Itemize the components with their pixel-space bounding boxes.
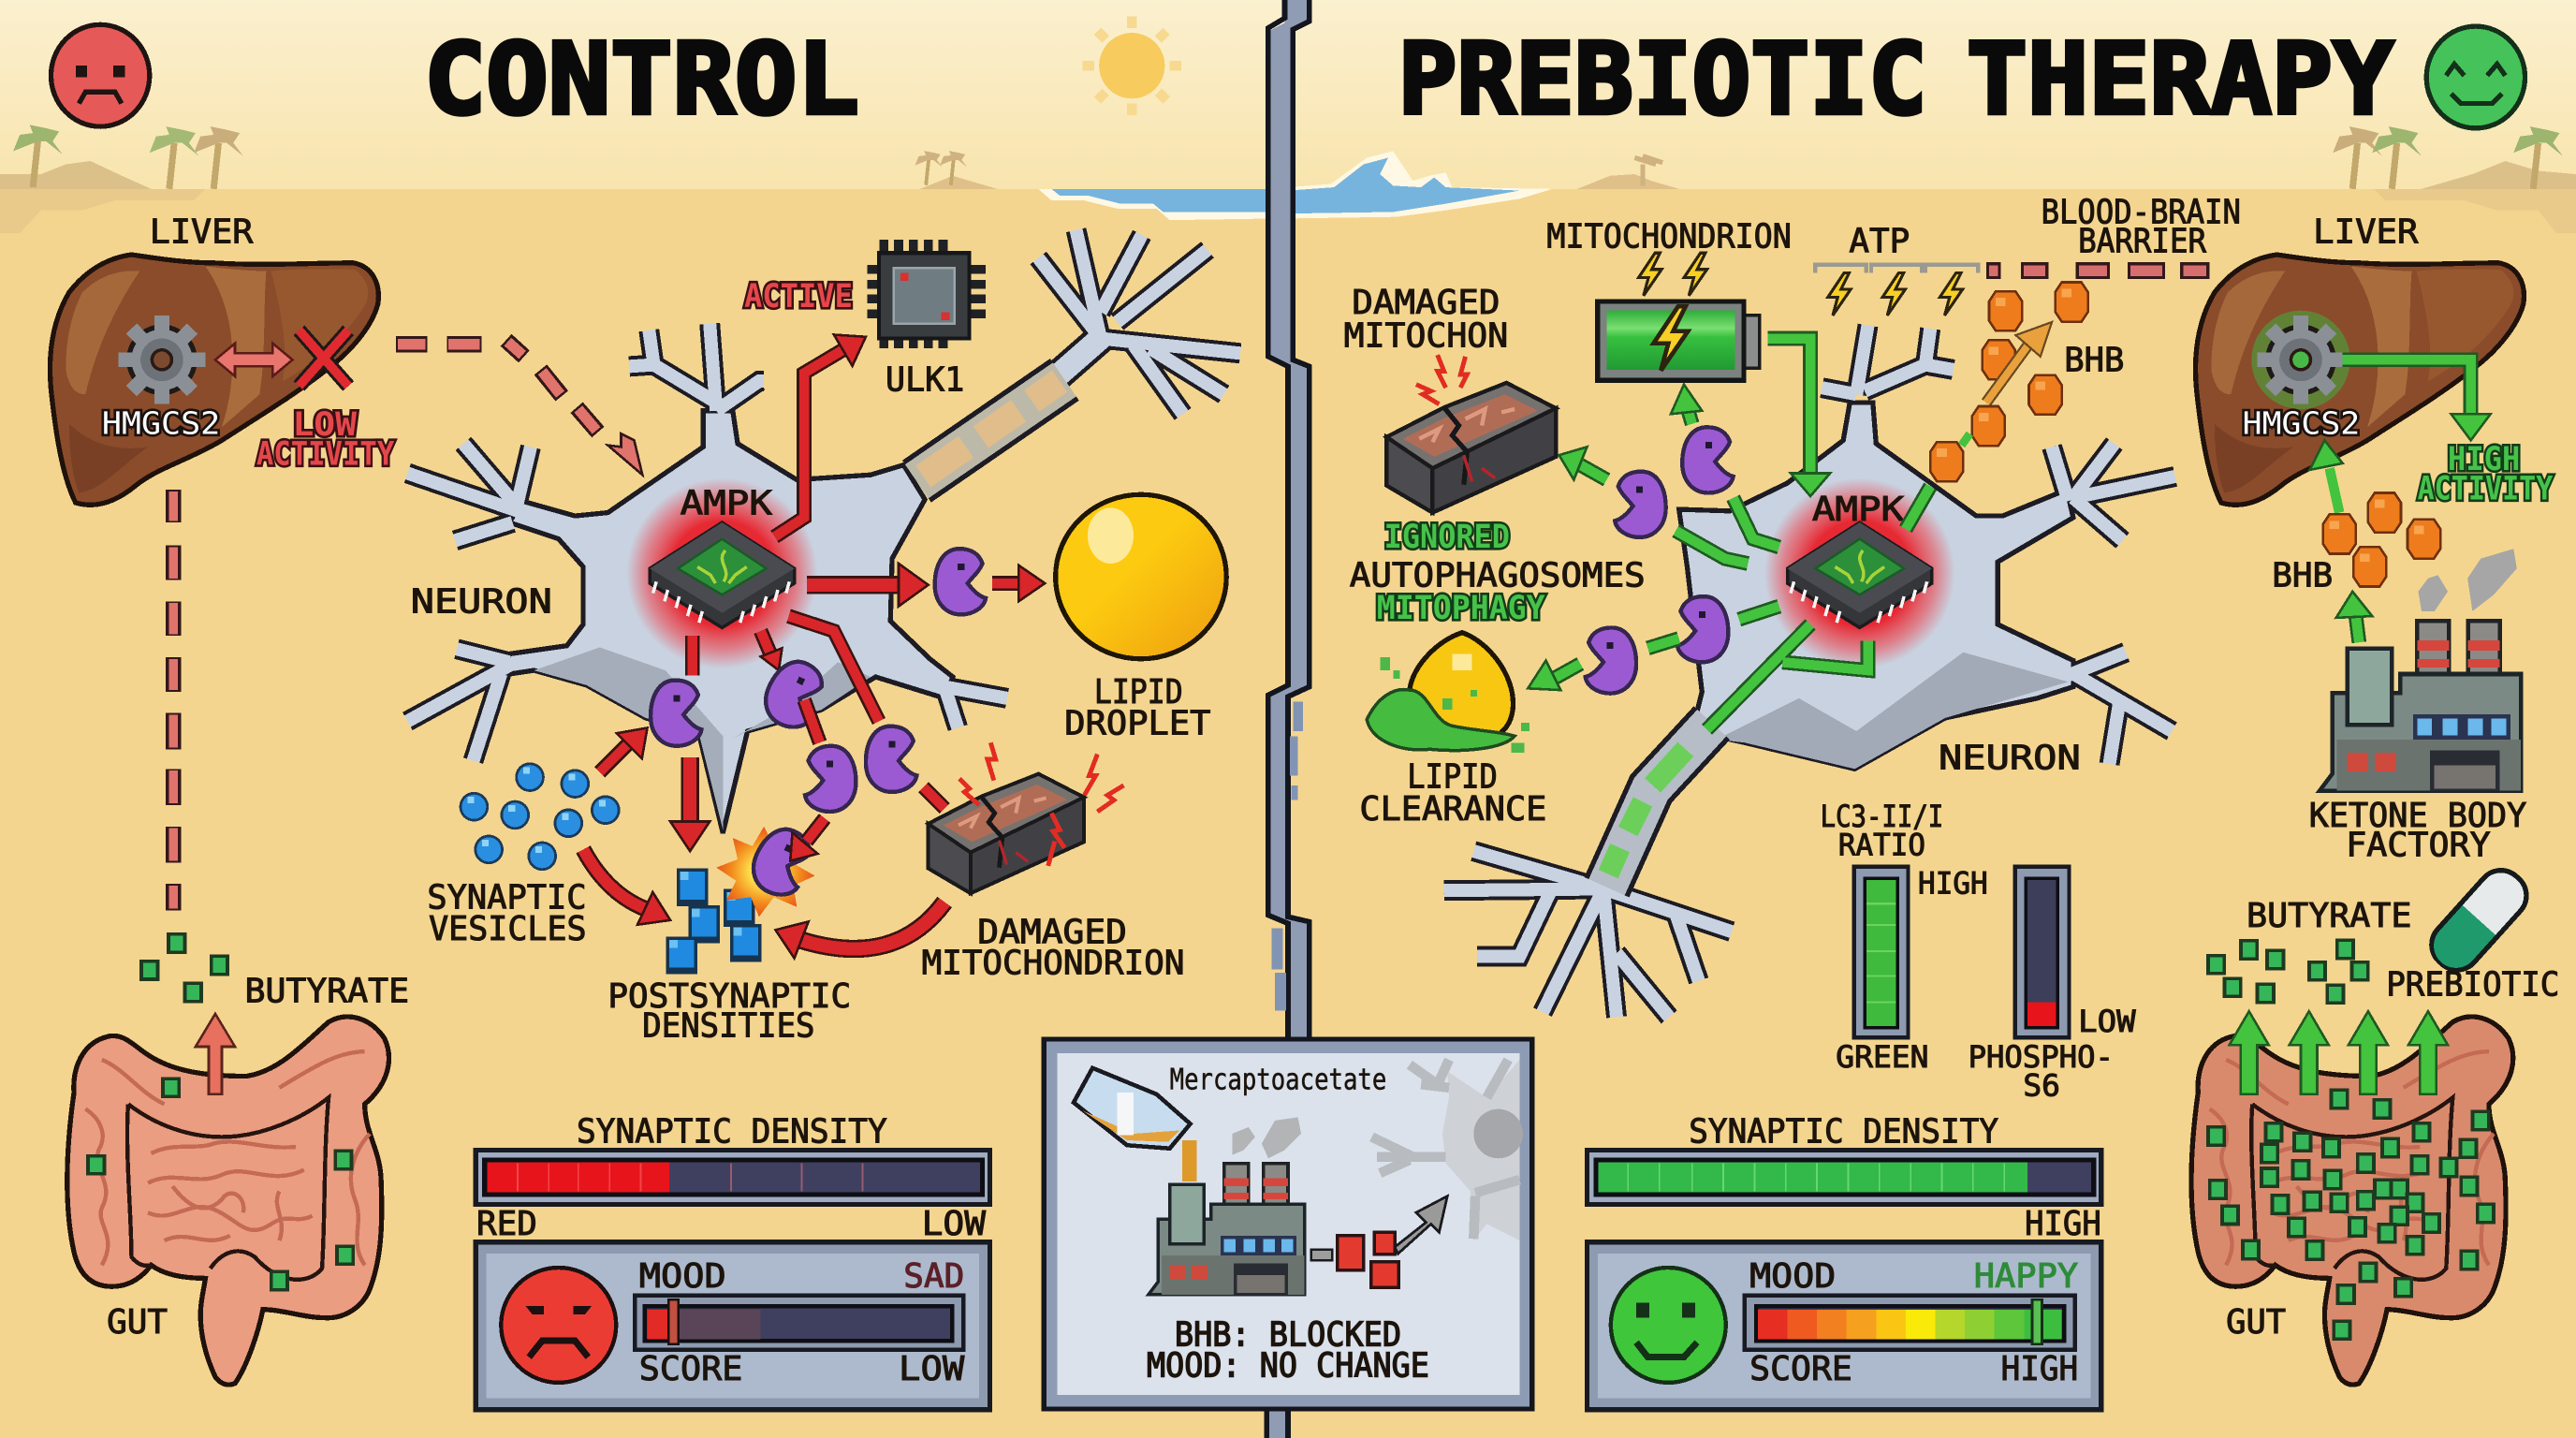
bracket above ATP bolts bbox=[1815, 265, 1978, 272]
arrow: gear to high activity bbox=[2343, 360, 2491, 440]
arrow: autophagosome to battery bbox=[1671, 385, 1702, 424]
mood slider fade bbox=[679, 1310, 761, 1339]
arrow: gut up bbox=[196, 1014, 235, 1094]
arrow: factory to BHB bbox=[2336, 592, 2372, 642]
happy label: HAPPY bbox=[1974, 1257, 2078, 1296]
lipid droplet bbox=[1056, 494, 1226, 659]
label: ketone body factory: FACTORY bbox=[2346, 826, 2491, 864]
red signalling lines bbox=[693, 616, 944, 808]
scenery: right palms and dune bbox=[2333, 126, 2576, 189]
label: lipid clearance: CLEARANCE bbox=[1359, 790, 1546, 829]
title: prebiotic therapy: PREBIOTIC bbox=[1398, 22, 1927, 137]
label low: LOW bbox=[922, 1205, 986, 1243]
label: AMPK: AMPK bbox=[681, 484, 772, 522]
label: green: GREEN bbox=[1836, 1041, 1928, 1075]
butyrate molecules bbox=[2206, 938, 2370, 1005]
label: high activity bbox=[2418, 440, 2553, 508]
panel: synaptic density control bbox=[476, 1113, 989, 1243]
label: high activity: HIGH bbox=[2448, 440, 2520, 478]
arrow: BHB orange bbox=[1962, 322, 2052, 446]
bar frame bbox=[476, 1151, 989, 1204]
AMPK glow bbox=[627, 478, 817, 668]
label: synaptic vesicles: SYNAPTIC bbox=[427, 879, 587, 917]
arrow: AMPK to autophagosome bbox=[807, 564, 929, 607]
arrow: autophagosome to damaged mitochondrion bbox=[1559, 447, 1606, 479]
label: blood-brain barrier bbox=[2042, 194, 2241, 260]
faded neuron bbox=[1372, 1060, 1523, 1240]
label: AMPK: AMPK bbox=[1812, 491, 1905, 529]
happy face bbox=[1611, 1268, 1726, 1383]
arrow: vesicles to autophagosome bbox=[600, 727, 648, 772]
label: active: ACTIVE bbox=[744, 277, 853, 315]
scenery: left dune and palms bbox=[0, 125, 243, 189]
background: sky bbox=[0, 0, 2576, 189]
icon: ULK1 chip bbox=[868, 240, 986, 348]
liver organ bbox=[2196, 255, 2524, 505]
label: BHB: BHB bbox=[2272, 557, 2333, 595]
panel: control pathway bbox=[50, 213, 1240, 1385]
icon: sun bbox=[1083, 17, 1181, 115]
icon: sad face bbox=[51, 24, 150, 126]
mood slider track bbox=[645, 1306, 952, 1341]
AMPK glow bbox=[1764, 478, 1955, 668]
label: synaptic vesicles: VESICLES bbox=[429, 910, 587, 948]
label: ignored: IGNORED bbox=[1384, 518, 1510, 556]
text: mood no change: MOOD: NO CHANGE bbox=[1147, 1347, 1429, 1386]
damaged mitochondrion bbox=[1386, 355, 1556, 513]
double arrow to X bbox=[215, 344, 292, 376]
label: HMGCS2: HMGCS2 bbox=[2243, 404, 2360, 441]
label: lipid droplet bbox=[1064, 673, 1211, 742]
icon: battery bbox=[1598, 301, 1760, 380]
gauge: phospho-S6 bbox=[2015, 867, 2070, 1037]
label: blood-brain barrier: BLOOD-BRAIN bbox=[2042, 194, 2241, 232]
mood slider value bbox=[648, 1310, 668, 1339]
gauge: LC3 bbox=[1854, 867, 1909, 1037]
label: autophagosomes: AUTOPHAGOSOMES bbox=[1350, 557, 1646, 595]
label: ketone body factory: KETONE BODY bbox=[2309, 797, 2526, 835]
arrow: autophagosome to lipid bbox=[992, 565, 1045, 601]
label: mercaptoacetate: Mercaptoacetate bbox=[1170, 1064, 1386, 1097]
icon: gear HMGCS2 bbox=[118, 315, 205, 404]
BHB molecules bbox=[2323, 493, 2440, 587]
mood slider thumb bbox=[2032, 1299, 2042, 1344]
label: SYNAPTIC DENSITY bbox=[1689, 1113, 1998, 1152]
label: lipid droplet: DROPLET bbox=[1064, 704, 1211, 742]
icon: AMPK chip bbox=[1788, 522, 1932, 627]
arrow: autophagosome to synapse bbox=[790, 818, 825, 861]
label high: HIGH bbox=[2025, 1205, 2101, 1243]
label: damaged mitochondrion bbox=[922, 913, 1184, 983]
bar track bbox=[1596, 1160, 2094, 1195]
scenery: sea left water bbox=[1051, 189, 1273, 212]
bar track bbox=[485, 1160, 983, 1195]
label: low activity: LOW bbox=[292, 405, 358, 444]
mood label: MOOD bbox=[1749, 1257, 1836, 1296]
icon: prebiotic capsule bbox=[2422, 861, 2536, 979]
label: gut: GUT bbox=[107, 1303, 168, 1342]
label: phospho-S6: PHOSPHO- bbox=[1969, 1041, 2114, 1075]
gut organ bbox=[67, 1017, 388, 1385]
autophagosome at synapse bbox=[744, 821, 818, 902]
blocked red BHB bbox=[1338, 1232, 1398, 1287]
label: LC3 ratio: RATIO bbox=[1838, 829, 1925, 862]
smoke bbox=[2418, 549, 2517, 611]
panel: synaptic density therapy bbox=[1587, 1113, 2101, 1243]
blood-brain barrier dashes bbox=[1988, 264, 2208, 278]
green signalling lines bbox=[1647, 486, 1930, 729]
label: HMGCS2: HMGCS2 bbox=[102, 404, 220, 441]
panel: mood therapy bbox=[1587, 1242, 2101, 1410]
mood slider thumb bbox=[668, 1299, 679, 1344]
arrow: mitochondrion curve bbox=[775, 902, 944, 959]
autophagosomes bbox=[1586, 427, 1734, 694]
icon: bottle pouring bbox=[1074, 1068, 1191, 1149]
label: gut: GUT bbox=[2226, 1303, 2286, 1342]
scenery: wave right bbox=[1288, 151, 1553, 218]
stub connector bbox=[1311, 1250, 1332, 1260]
bar frame bbox=[1587, 1151, 2101, 1204]
label red: RED bbox=[476, 1205, 537, 1243]
label: prebiotic: PREBIOTIC bbox=[2386, 966, 2559, 1005]
label: high: HIGH bbox=[1918, 868, 1988, 902]
neuron: therapy bbox=[1444, 325, 2175, 1017]
title: prebiotic therapy bbox=[1398, 22, 2393, 137]
label: damaged mitochondrion: MITOCHONDRION bbox=[922, 945, 1184, 983]
low label: LOW bbox=[899, 1350, 965, 1388]
label: butyrate: BUTYRATE bbox=[245, 973, 409, 1011]
damaged mitochondrion bbox=[929, 742, 1123, 893]
label: LC3 ratio bbox=[1821, 800, 1943, 862]
lipid clearance blob bbox=[1367, 633, 1530, 753]
centre divider bbox=[1266, 0, 1310, 1438]
label: ketone body factory bbox=[2309, 797, 2526, 864]
label: damaged mitochon: DAMAGED bbox=[1352, 284, 1500, 322]
orange stream bbox=[1182, 1140, 1197, 1181]
scenery: mid-right dune bbox=[1577, 156, 1679, 189]
icon: red cross fill bbox=[299, 330, 348, 386]
arrow: battery to AMPK bbox=[1767, 339, 1830, 496]
label: lipid clearance: LIPID bbox=[1407, 758, 1498, 797]
butyrate molecules bbox=[139, 932, 229, 1003]
label: SYNAPTIC DENSITY bbox=[577, 1113, 887, 1152]
scenery: sea left bbox=[1038, 189, 1273, 220]
text: BHB blocked: BHB: BLOCKED bbox=[1175, 1315, 1401, 1354]
label: postsynaptic densities: POSTSYNAPTIC bbox=[607, 977, 851, 1016]
label: synaptic vesicles bbox=[427, 879, 587, 948]
autophagosomes bbox=[651, 653, 916, 812]
label: blood-brain barrier: BARRIER bbox=[2078, 222, 2206, 260]
score label: SCORE bbox=[639, 1350, 742, 1388]
panel: mercaptoacetate experiment bbox=[1044, 1039, 1532, 1409]
ticks bbox=[518, 1164, 862, 1191]
mood slider frame bbox=[1745, 1296, 2075, 1350]
label: low activity bbox=[256, 405, 394, 474]
factory bbox=[2320, 621, 2521, 791]
icon: red cross bbox=[299, 330, 348, 386]
dashed arrow gut to liver bbox=[168, 490, 178, 910]
liver organ bbox=[50, 255, 378, 505]
ATP bolts bbox=[1828, 272, 1963, 315]
bar fill red bbox=[487, 1163, 669, 1192]
label: low: LOW bbox=[2078, 1005, 2137, 1039]
icon: AMPK chip bbox=[650, 522, 795, 627]
bar fill green bbox=[1599, 1163, 2027, 1192]
smoke bbox=[1232, 1117, 1301, 1158]
label: ATP: ATP bbox=[1849, 222, 1910, 260]
mood slider gradient cells bbox=[1758, 1310, 2062, 1339]
label: mitophagy: MITOPHAGY bbox=[1377, 589, 1545, 627]
gut organ bbox=[2191, 1017, 2513, 1385]
factory bbox=[1149, 1164, 1305, 1295]
label: postsynaptic densities: DENSITIES bbox=[642, 1006, 815, 1045]
dashed arrow liver to neuron bbox=[396, 340, 642, 475]
sad label: SAD bbox=[903, 1257, 964, 1296]
panel: prebiotic pathway bbox=[1344, 194, 2559, 1385]
BHB crossing barrier bbox=[1930, 283, 2088, 481]
title: control: CONTROL bbox=[424, 22, 859, 137]
label: ULK1: ULK1 bbox=[886, 361, 964, 400]
icon: gear with glow bbox=[2251, 311, 2350, 409]
label: phospho-S6 bbox=[1969, 1041, 2114, 1104]
title: prebiotic therapy: THERAPY bbox=[1967, 22, 2393, 137]
neuron: control bbox=[407, 230, 1240, 833]
panel: mood control bbox=[476, 1242, 989, 1410]
autophagosome eating lipid bbox=[935, 549, 986, 614]
label: liver: LIVER bbox=[2313, 213, 2419, 252]
mood slider frame bbox=[635, 1296, 963, 1350]
mood label: MOOD bbox=[639, 1257, 726, 1296]
label: damaged mitochondrion: DAMAGED bbox=[977, 913, 1127, 951]
icon: happy face bbox=[2426, 26, 2525, 128]
red line into autophagosome bbox=[804, 700, 820, 742]
high label: HIGH bbox=[2001, 1350, 2078, 1388]
label: LC3 ratio: LC3-II/I bbox=[1821, 800, 1943, 834]
ticks bbox=[1628, 1164, 2004, 1191]
explosion bbox=[716, 827, 815, 917]
sad face bbox=[501, 1268, 616, 1383]
arrow: vesicles curve bbox=[583, 849, 670, 925]
label: liver: LIVER bbox=[150, 213, 254, 252]
label: lipid clearance bbox=[1359, 758, 1546, 829]
synaptic vesicles bbox=[460, 762, 621, 871]
label: lipid droplet: LIPID bbox=[1094, 673, 1183, 712]
arrow: AMPK to ULK1 bbox=[775, 334, 866, 536]
label: low activity: ACTIVITY bbox=[256, 435, 394, 474]
mood slider track bbox=[1756, 1306, 2064, 1341]
grey arrow bbox=[1395, 1196, 1447, 1254]
scenery: mid-left dune bbox=[915, 151, 997, 189]
label: phospho-S6: S6 bbox=[2023, 1070, 2060, 1104]
green butyrate in gut bbox=[2206, 1089, 2496, 1341]
label: butyrate: BUTYRATE bbox=[2247, 897, 2411, 935]
label: neuron: NEURON bbox=[411, 583, 552, 622]
label: damaged mitochon bbox=[1344, 284, 1508, 355]
postsynaptic densities bbox=[666, 869, 762, 975]
green arrows up from gut bbox=[2230, 1011, 2448, 1094]
arrow: down to densities bbox=[670, 757, 710, 851]
arrow: BHB to liver bbox=[2310, 440, 2343, 513]
label: damaged mitochon: MITOCHON bbox=[1344, 316, 1508, 355]
bolts bbox=[1639, 253, 1707, 296]
arrow: autophagosome to lipid bbox=[1528, 661, 1580, 690]
label: neuron: NEURON bbox=[1939, 739, 2081, 777]
label: high activity: ACTIVITY bbox=[2418, 470, 2553, 508]
label: postsynaptic densities bbox=[607, 977, 851, 1045]
score label: SCORE bbox=[1749, 1350, 1852, 1388]
label: BHB: BHB bbox=[2064, 342, 2124, 380]
label: mitochondrion: MITOCHONDRION bbox=[1546, 217, 1792, 256]
